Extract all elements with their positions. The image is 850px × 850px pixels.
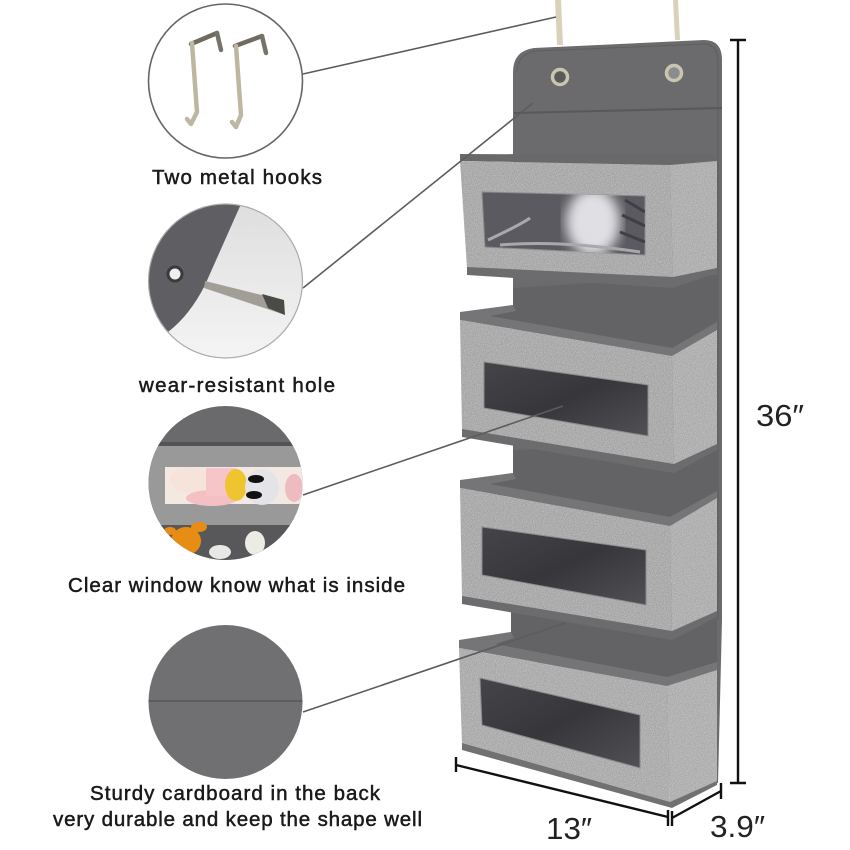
pocket 2 side [672,330,717,465]
pocket 4 interior [462,612,717,685]
callout: two metal hooks [148,4,322,189]
pocket 1 rim [460,154,717,165]
pocket 4 side [667,670,717,805]
pocket 4 front [459,648,670,805]
caption: Two metal hooks [152,166,322,189]
pocket 3 rim [460,473,717,526]
dimension: width 13 in: 13″ [546,811,592,846]
grommets [552,66,682,84]
pocket 1 [460,154,717,288]
dimension: height 36 in [730,40,804,783]
icon: right hook [232,36,266,127]
pocket 4 rim [459,632,717,686]
caption line 1: Sturdy cardboard in the back [90,782,381,805]
dimension: height 36 in: 36″ [756,398,804,433]
pocket 4 window [480,678,640,768]
pocket 3 interior [462,445,717,525]
pocket 3 [460,445,717,640]
pocket 2 [460,275,717,473]
pocket 1 bottom trim [467,267,717,288]
pocket 2 window [484,362,648,436]
callout: wear-resistant hole [138,204,335,397]
circle outline [148,204,302,358]
caption: wear-resistant hole [138,374,335,397]
circle image [148,406,305,565]
pocket 4 [459,612,717,808]
dimension: depth 3.9 in: 3.9″ [710,809,765,844]
circle image [148,624,304,780]
pocket 2 interior [462,275,717,355]
pocket 1 side [670,161,717,278]
dimension: width 13 in [456,757,668,846]
caption line 2: very durable and keep the shape well [53,808,422,831]
pocket 3 bottom trim [462,596,717,640]
pocket 3 front [460,488,672,632]
pocket 3 side [670,498,717,632]
pocket 3 window [482,527,646,605]
pocket 2 rim [460,305,717,356]
callout: clear window [68,406,405,597]
circle image [148,204,304,360]
leader lines [303,17,565,712]
circle outline [148,4,302,158]
panel stitching fold [514,44,722,620]
back panel [513,40,722,783]
caption: Clear window know what is inside [68,574,405,597]
pocket 2 bottom trim [462,429,717,473]
metal hooks on door [555,0,680,45]
dimension: depth 3.9 in [672,783,765,844]
callout: sturdy cardboard [53,624,422,831]
pocket 4 bottom trim [462,743,717,808]
icon: left hook [187,33,221,124]
organizer product [459,0,722,808]
pocket 1 front [460,161,673,278]
pocket 1 window [482,188,645,256]
pocket 2 front [460,320,674,465]
